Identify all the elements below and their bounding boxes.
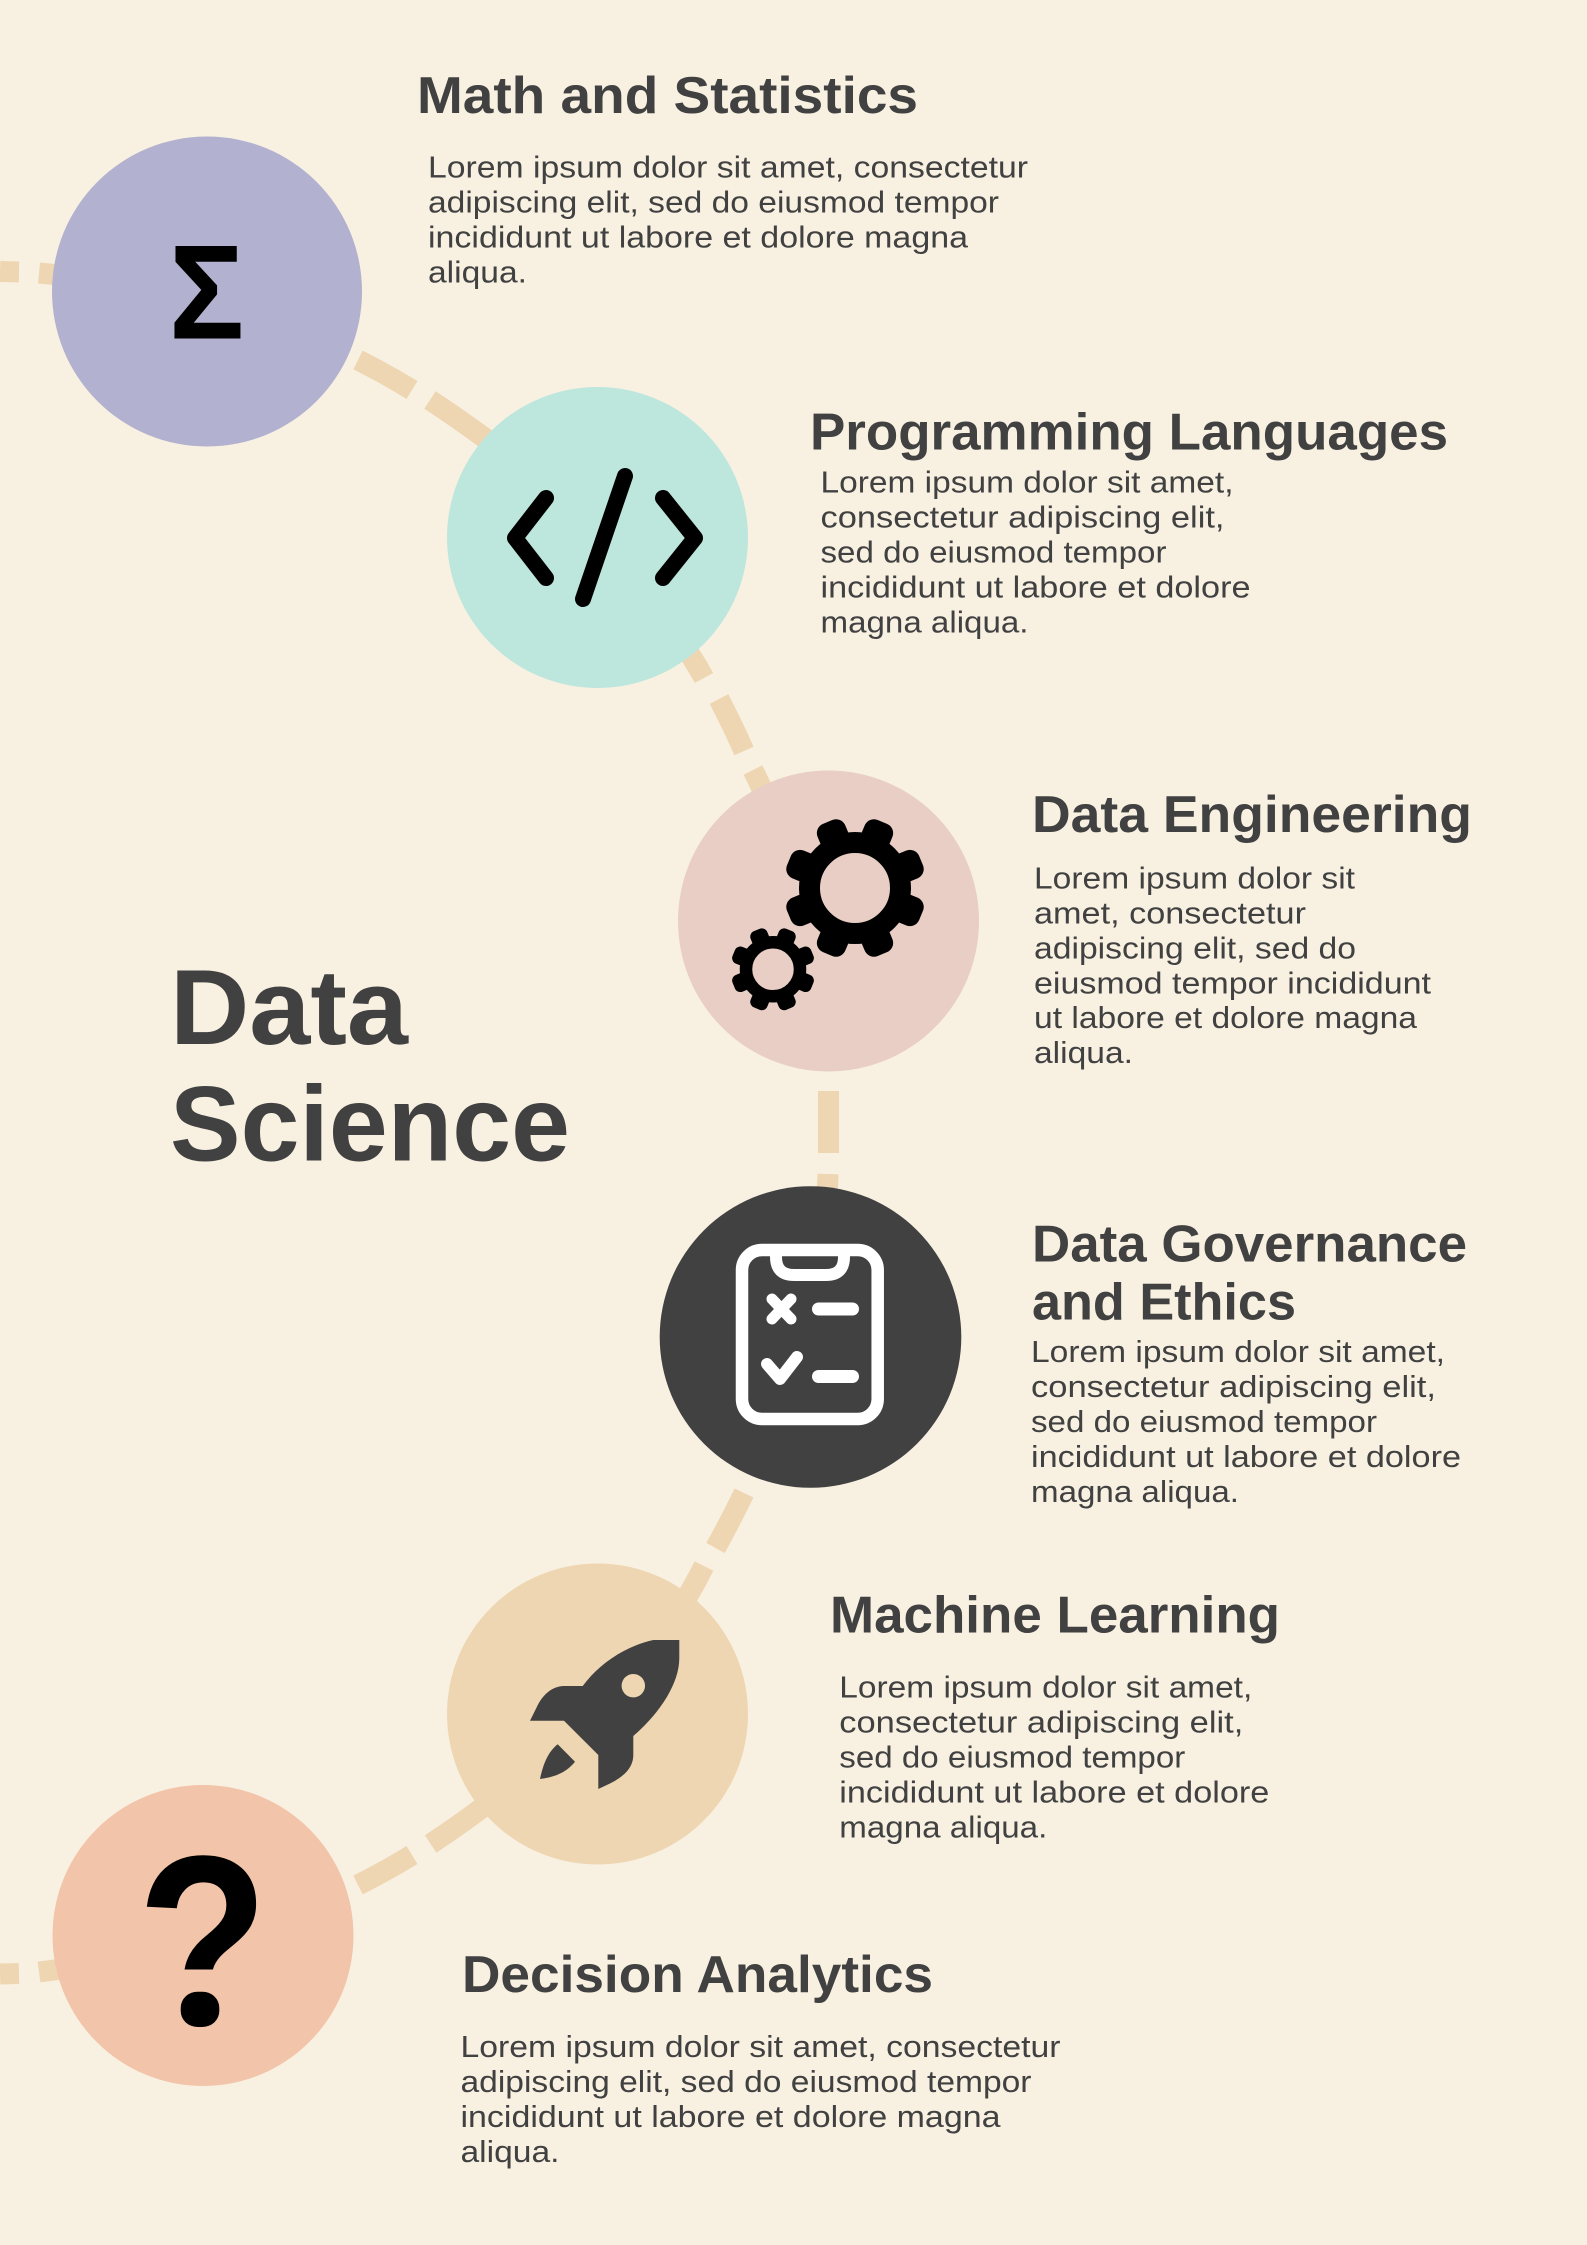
icon: question mark xyxy=(146,1855,256,2027)
body text: incididunt ut labore et dolore xyxy=(1031,1439,1461,1474)
body text: adipiscing elit, sed do eiusmod tempor xyxy=(428,185,999,220)
circle xyxy=(447,387,748,688)
body text: adipiscing elit, sed do eiusmod tempor xyxy=(460,2064,1032,2099)
body text: sed do eiusmod tempor xyxy=(820,534,1166,569)
heading: Machine Learning xyxy=(830,1586,1280,1644)
title: Data xyxy=(170,947,410,1067)
circle xyxy=(660,1186,961,1488)
body text: Lorem ipsum dolor sit amet, consectetur xyxy=(428,150,1028,185)
body text: ut labore et dolore magna xyxy=(1034,1000,1418,1035)
panel: programming languages xyxy=(447,387,1448,688)
body text: consectetur adipiscing elit, xyxy=(820,499,1224,534)
body text: aliqua. xyxy=(1034,1035,1133,1070)
heading: Data Governance xyxy=(1032,1215,1467,1273)
icon: sigma: Σ xyxy=(170,219,244,367)
circle xyxy=(447,1564,748,1864)
body text: sed do eiusmod tempor xyxy=(839,1739,1185,1774)
body text: magna aliqua. xyxy=(1031,1474,1239,1509)
heading: Data Engineering xyxy=(1032,786,1472,844)
body text: consectetur adipiscing elit, xyxy=(839,1704,1243,1739)
body text xyxy=(428,150,1028,290)
body text: Lorem ipsum dolor sit amet, xyxy=(839,1669,1252,1704)
body text: amet, consectetur xyxy=(1034,896,1306,930)
panel: data governance and ethics xyxy=(660,1186,1467,1509)
body text xyxy=(1034,860,1431,1070)
title: Science xyxy=(170,1064,570,1184)
body text: adipiscing elit, sed do xyxy=(1034,930,1356,966)
body text: Lorem ipsum dolor sit amet, xyxy=(1031,1334,1445,1369)
body text: incididunt ut labore et dolore magna xyxy=(428,220,969,255)
panel: machine learning xyxy=(447,1564,1280,1864)
circle xyxy=(52,1785,354,2086)
body text: incididunt ut labore et dolore magna xyxy=(460,2099,1001,2134)
heading: Programming Languages xyxy=(810,403,1448,461)
panel: data engineering xyxy=(678,770,1472,1072)
body text: incididunt ut labore et dolore xyxy=(820,569,1250,604)
circle xyxy=(52,136,362,446)
body text: Lorem ipsum dolor sit amet, xyxy=(820,464,1234,499)
body text: magna aliqua. xyxy=(839,1809,1047,1844)
panel: math and statistics xyxy=(52,67,1028,446)
body text xyxy=(1031,1334,1461,1509)
body text: aliqua. xyxy=(428,255,527,290)
body text: magna aliqua. xyxy=(820,604,1028,639)
icon: question mark: ? xyxy=(137,1805,268,2079)
body text xyxy=(460,2029,1060,2169)
title xyxy=(170,947,570,1184)
icon: rocket xyxy=(530,1640,679,1789)
body text: eiusmod tempor incididunt xyxy=(1034,966,1431,1000)
panel: decision analytics xyxy=(52,1785,1060,2169)
heading: Math and Statistics xyxy=(417,67,918,125)
body text: sed do eiusmod tempor xyxy=(1031,1404,1377,1439)
icon: code brackets xyxy=(515,476,695,599)
body text xyxy=(820,464,1250,639)
icon: gears xyxy=(730,816,927,1012)
heading: Decision Analytics xyxy=(462,1946,933,2004)
body text: incididunt ut labore et dolore xyxy=(839,1774,1269,1809)
body text: Lorem ipsum dolor sit amet, consectetur xyxy=(460,2029,1060,2064)
body text xyxy=(839,1669,1269,1844)
body text: aliqua. xyxy=(460,2134,560,2169)
circle xyxy=(678,770,979,1072)
dashed connector path xyxy=(0,272,828,1974)
heading: and Ethics xyxy=(1032,1273,1296,1331)
body text: consectetur adipiscing elit, xyxy=(1031,1369,1436,1404)
heading xyxy=(1032,1215,1467,1331)
body text: Lorem ipsum dolor sit xyxy=(1034,860,1355,896)
icon: clipboard checklist xyxy=(742,1250,878,1419)
